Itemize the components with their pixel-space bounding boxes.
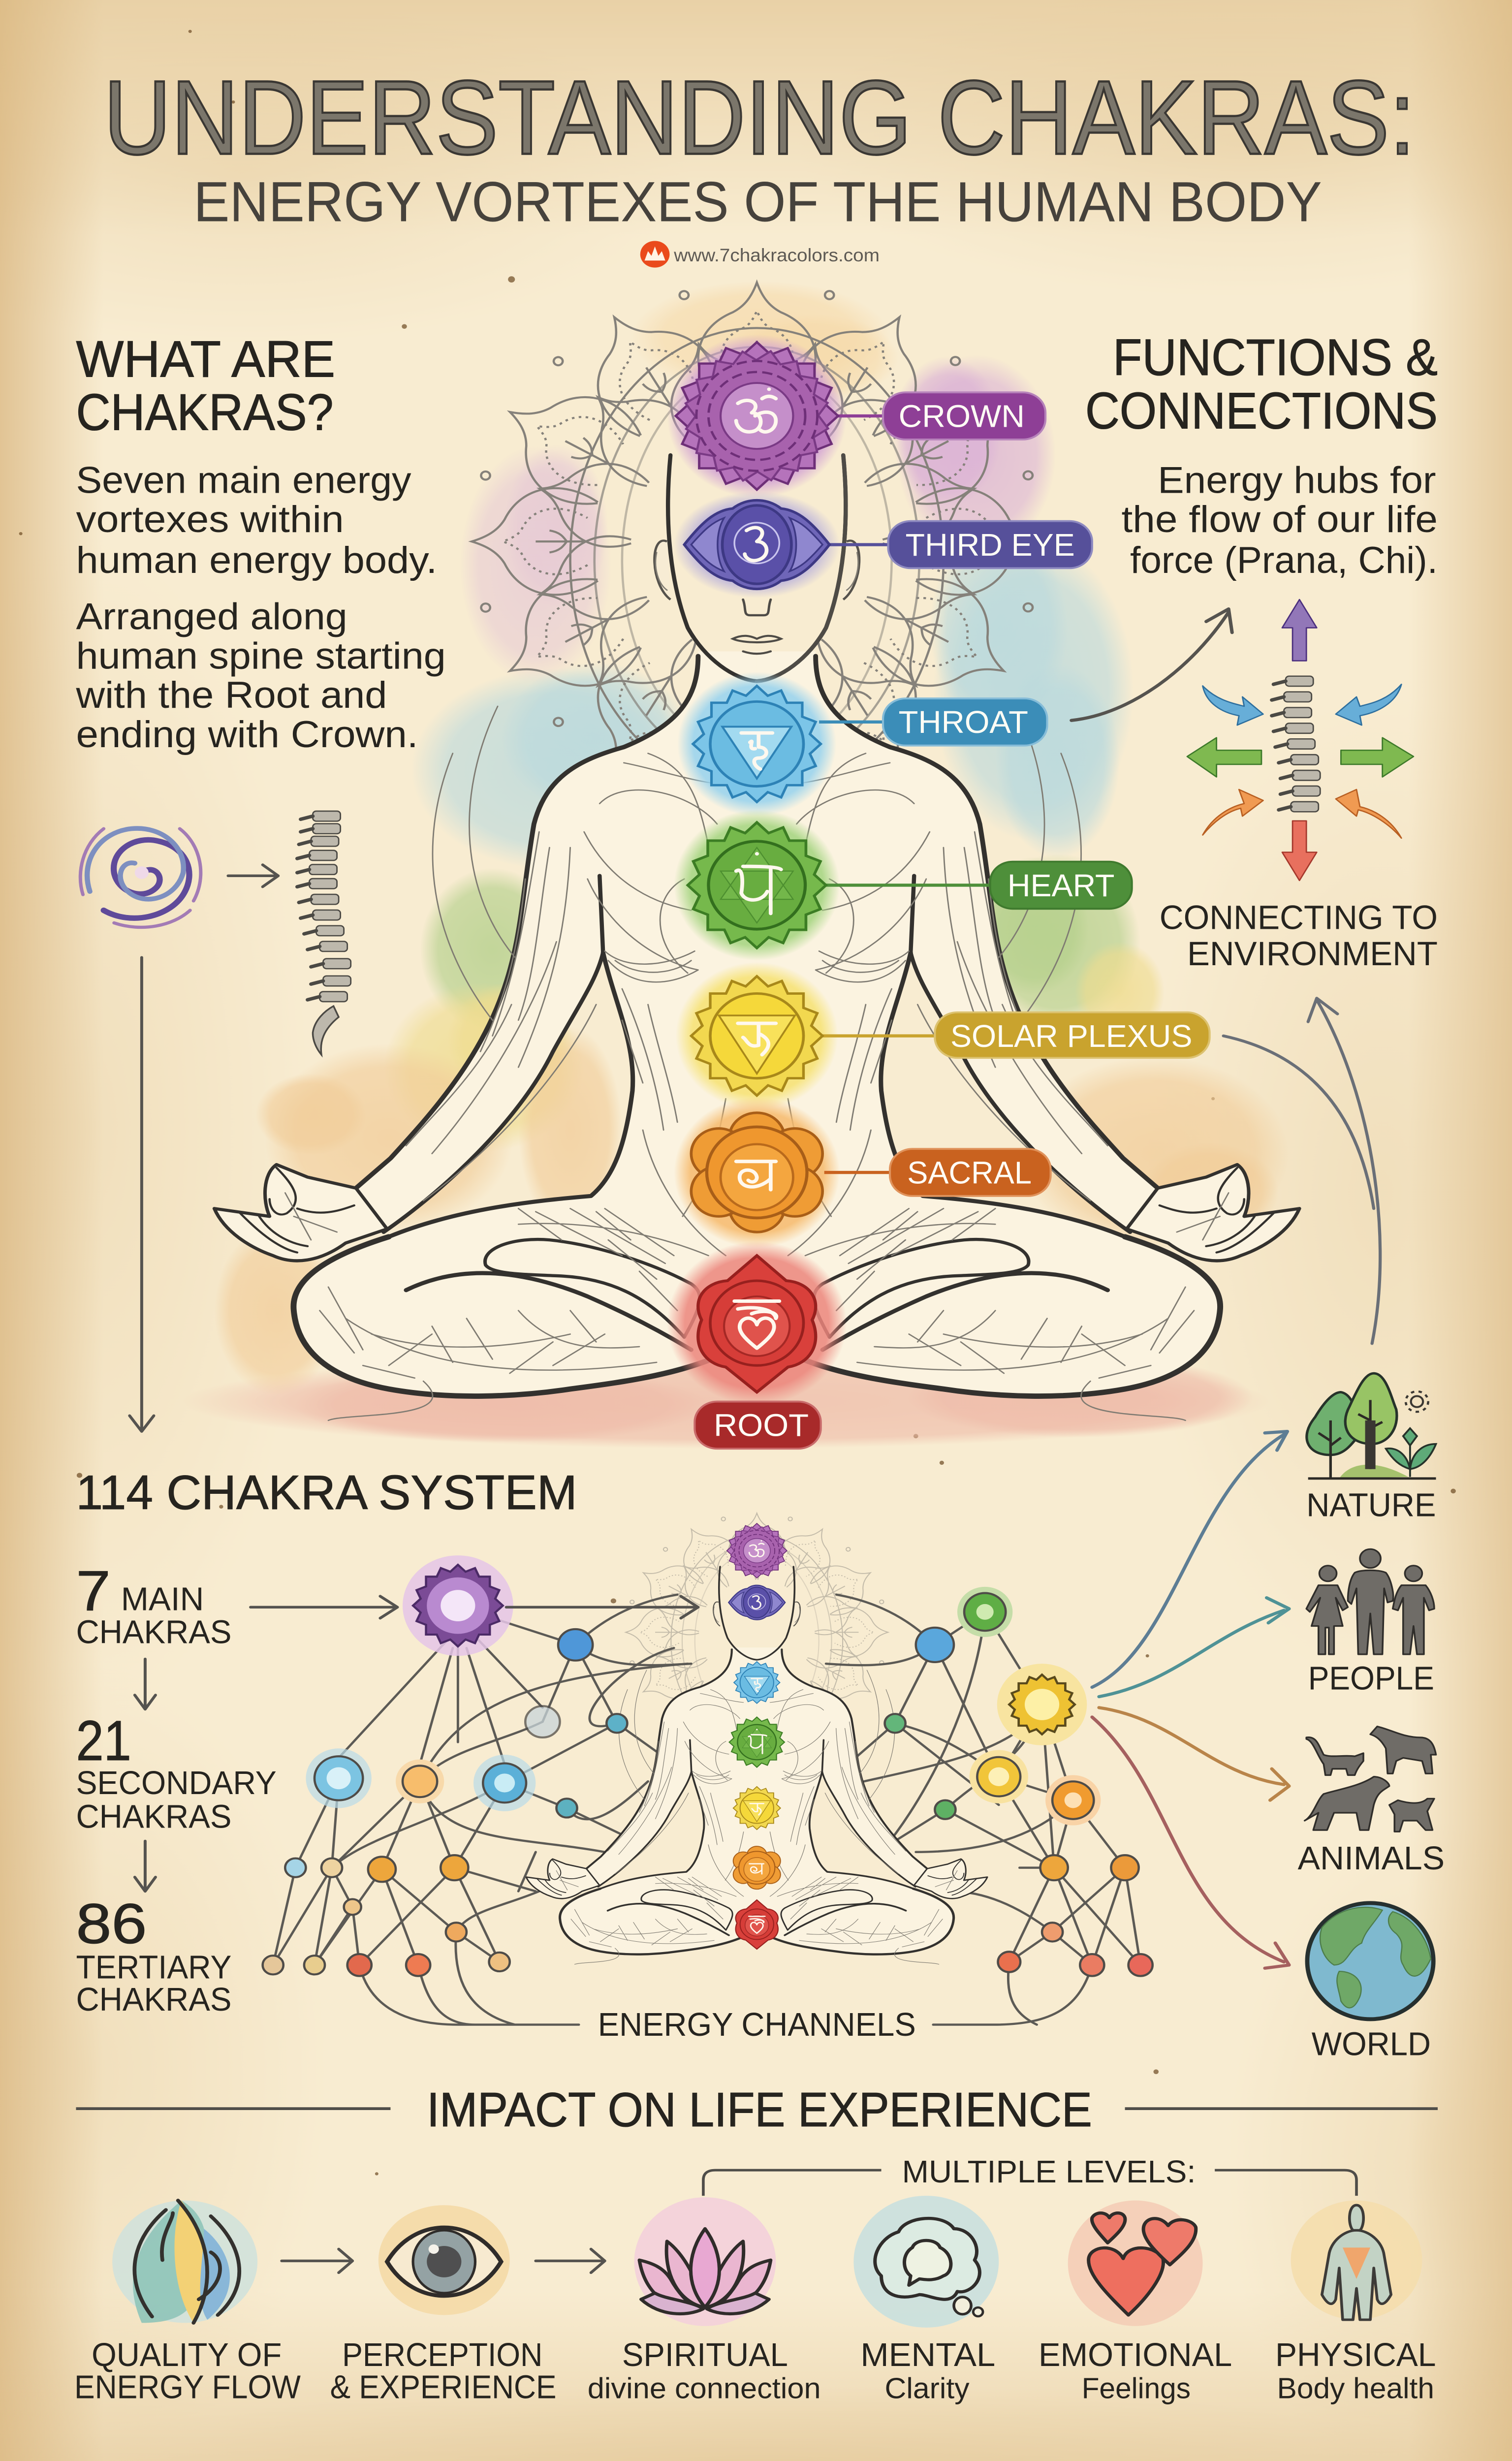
text: what are chakras description: with the Root and [75,674,387,716]
stat: 86 tertiary chakras: CHAKRAS [76,1981,231,2018]
text: what are chakras description: human spine starting [76,635,446,677]
label: solar plexus: SOLAR PLEXUS [950,1019,1192,1054]
label: nature: NATURE [1306,1486,1436,1523]
arrow: spiral to spine [228,865,278,887]
sacral chakra [691,1113,822,1232]
green right arrow [1341,738,1414,777]
text: functions description: force (Prana, Chi). [1130,539,1438,581]
crown chakra [672,339,842,493]
stat: 86 tertiary chakras: TERTIARY [76,1949,231,1986]
heart chakra [688,822,826,948]
text: connecting to environment: CONNECTING TO [1160,899,1438,937]
root chakra [698,1256,816,1392]
stat: 21 secondary chakras: 21 [76,1709,131,1772]
icon: energy spiral [80,828,201,927]
label: people: PEOPLE [1308,1660,1434,1697]
icon: emotional hearts [1068,2201,1203,2326]
mandala behind the head [472,282,1042,801]
arrow: purple node to figure [506,1596,698,1618]
icon: quality of energy flow [112,2201,257,2323]
arrow: throat to functions [1071,609,1232,721]
text: what are chakras description [75,459,446,756]
icon: nature [1307,1373,1436,1479]
label: heart [990,862,1132,909]
icon: mental thought cloud [853,2196,999,2328]
stat: 7 main chakras [76,1559,231,1650]
label: physical: PHYSICAL [1275,2336,1436,2373]
main meditating figure [214,455,1299,1420]
text: connecting to environment [1160,899,1438,973]
text: what are chakras description: ending with Crown. [76,713,418,756]
purple main node [403,1555,513,1656]
arrows: solar plexus and nature up to environment [1224,998,1380,1344]
label: spiritual: divine connection [588,2372,821,2405]
arrow: 7 main to purple node [251,1596,397,1618]
label: perception and experience: & EXPERIENCE [330,2368,556,2405]
stat: 7 main chakras: MAIN [121,1580,204,1617]
label: crown: CROWN [899,399,1025,434]
icon: spine with energy arrows [1187,599,1414,881]
label: perception and experience [330,2336,556,2405]
text: functions description [1122,459,1438,581]
label: emotional: Feelings [1082,2372,1191,2405]
throat chakra [693,686,821,802]
label: quality of energy flow [74,2336,301,2405]
label: root: ROOT [714,1408,809,1443]
label: spiritual [588,2336,821,2405]
subtitle: ENERGY VORTEXES OF THE HUMAN BODY [193,170,1322,233]
connector lines from chakras to labels [819,416,990,1172]
label: perception and experience: PERCEPTION [342,2336,542,2373]
energy channels label: ENERGY CHANNELS [598,2006,916,2043]
stat: 21 secondary chakras [76,1709,277,1835]
green left arrow [1187,738,1261,777]
text: functions description: the flow of our life [1122,499,1438,540]
stat: 86 tertiary chakras [76,1892,231,2018]
text: connecting to environment: ENVIRONMENT [1187,935,1438,973]
solar plexus chakra [691,976,822,1096]
label: third eye [888,521,1092,568]
label: heart: HEART [1008,868,1115,903]
multiple levels bracket: MULTIPLE LEVELS: [902,2154,1196,2189]
watercolor washes behind main figure [182,281,1289,1449]
heading: functions and connections: CONNECTIONS [1085,382,1438,440]
text: what are chakras description: Arranged along [76,596,347,638]
label: emotional: EMOTIONAL [1039,2336,1232,2373]
arrow: 21 to 86 [135,1841,156,1891]
label: mental: MENTAL [860,2336,995,2373]
icon: spiritual lotus [634,2197,776,2326]
stat: 7 main chakras: 7 [76,1559,111,1622]
small chakra column [725,1522,788,1949]
blue arrows [1203,684,1401,725]
icon: physical body [1291,2201,1422,2320]
text: what are chakras description: Seven main energy [76,459,411,501]
stat: 86 tertiary chakras: 86 [76,1892,147,1955]
orange arrows [1203,789,1401,838]
label: throat [883,698,1047,746]
heading: functions and connections: FUNCTIONS & [1113,329,1438,386]
label: quality of energy flow: QUALITY OF [92,2336,282,2373]
label: world: WORLD [1312,2025,1431,2062]
label: physical [1275,2336,1436,2405]
website logo and address: www.7chakracolors.com [673,246,880,265]
chakra halos [667,334,847,1405]
text: what are chakras description: human energy body. [76,539,437,581]
secondary and tertiary nodes: left [263,1629,627,1976]
arrow: spiral down to 114 chakra system [129,957,154,1431]
small mandala [626,1513,888,1752]
arrow: flow to perception [282,2249,352,2272]
arrows: outward to environment icons [1092,1431,1289,1968]
heading: functions and connections [1085,329,1438,440]
heading: what are chakras [76,330,335,442]
label: throat: THROAT [899,705,1028,740]
text: what are chakras description: vortexes within [76,499,344,540]
label: mental: Clarity [885,2372,970,2405]
label: mental [860,2336,995,2405]
multiple levels bracket [703,2154,1356,2196]
stat: 7 main chakras: CHAKRAS [76,1613,231,1650]
icon: perception eye [378,2205,510,2315]
icon: world globe [1307,1903,1433,2019]
icon: people [1306,1549,1434,1654]
heading: what are chakras: CHAKRAS? [76,384,334,442]
arrow: 7 to 21 [135,1659,156,1709]
icon: animals [1305,1727,1436,1831]
heading: what are chakras: WHAT ARE [76,330,335,388]
label: animals: ANIMALS [1298,1839,1445,1876]
energy channel network lines [273,1595,1140,2025]
arrow: perception to spiritual [536,2249,605,2272]
stat: 21 secondary chakras: SECONDARY [76,1764,277,1801]
text: functions description: Energy hubs for [1158,459,1436,501]
third eye chakra [684,500,829,589]
icon: spine left [297,811,351,1055]
label: crown [883,392,1045,440]
label: quality of energy flow: ENERGY FLOW [74,2368,301,2405]
secondary and tertiary nodes: right [885,1587,1153,1976]
central spine [1272,676,1320,812]
label: physical: Body health [1277,2372,1434,2405]
heading: 114 chakra system: 114 CHAKRA SYSTEM [76,1466,577,1520]
label: sacral: SACRAL [907,1155,1032,1191]
red down arrow [1282,821,1317,881]
purple up arrow [1282,599,1317,661]
stat: 21 secondary chakras: CHAKRAS [76,1798,231,1835]
website logo and address [640,241,880,268]
face details [733,455,846,681]
label: spiritual: SPIRITUAL [622,2336,788,2373]
label: third eye: THIRD EYE [906,528,1075,563]
small meditating figure [526,1567,987,1964]
label: sacral [890,1149,1051,1196]
label: root [694,1402,821,1449]
section heading: impact on life experience: IMPACT ON LIFE EXPERIENCE [427,2083,1092,2137]
label: emotional [1039,2336,1232,2405]
